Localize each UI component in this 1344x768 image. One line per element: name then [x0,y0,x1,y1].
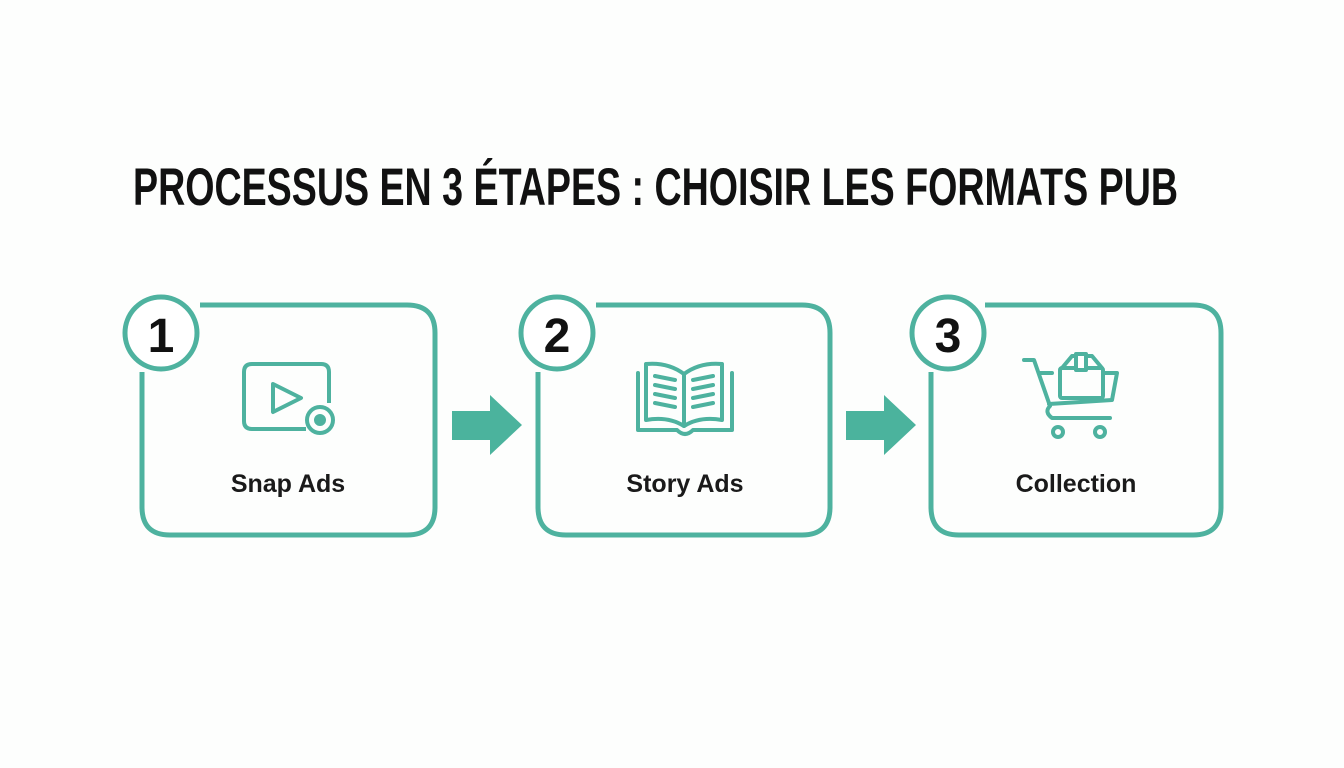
badge 1: 1 [148,310,174,363]
label: Collection: Collection [1016,470,1136,498]
label: Story Ads: Story Ads [626,470,744,498]
badge 1 [125,297,197,369]
panel: step 2 Story Ads [521,297,830,535]
panel: step 1 Snap Ads [125,297,435,535]
icon: open book [638,364,732,434]
badge 2: 2 [544,310,570,363]
arrow 2 [846,395,916,455]
icon: shopping cart [1024,354,1117,437]
icon: video play [244,364,333,433]
badge 2 [521,297,593,369]
arrow 1 [452,395,522,455]
badge 3: 3 [935,310,961,363]
label: Snap Ads: Snap Ads [231,470,345,498]
panel: step 3 Collection [912,297,1221,535]
badge 3 [912,297,984,369]
